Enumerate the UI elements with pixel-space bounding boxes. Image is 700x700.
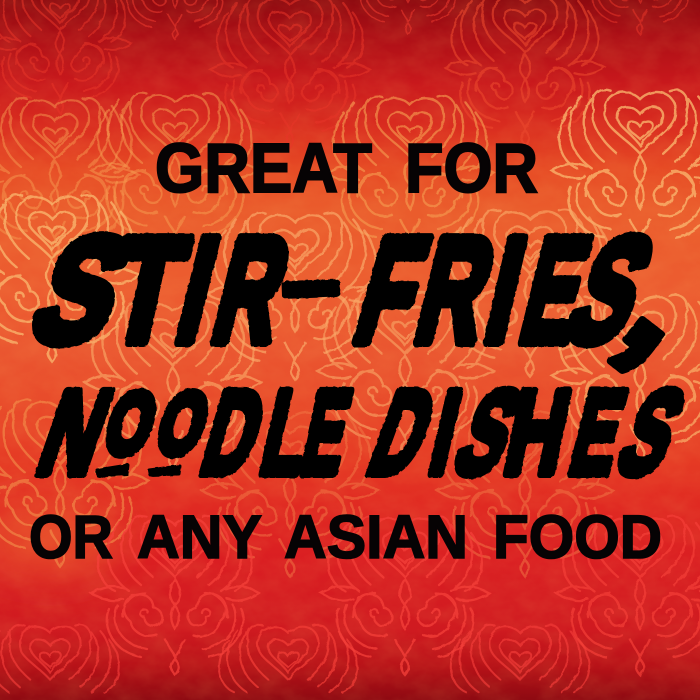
word: fries: R [403,207,508,373]
word: noodle: E [293,367,360,499]
word: stir [13,207,303,373]
dash: - [278,224,344,338]
word: noodle: D [190,366,278,498]
word: great: GREAT [155,129,372,207]
word: noodle: L [251,367,323,499]
word: dishes: E [560,368,636,499]
word: any: ANY [137,503,262,571]
word: asian: ASIAN [284,503,468,571]
brush headline: noodle dishes [24,366,700,499]
closing line: or any Asian food [29,503,662,571]
word: stir: R [200,207,303,373]
word: fries: F [341,208,442,373]
word: stir: S [13,208,149,373]
word: for: FOR [405,129,538,207]
word: food: FOOD [493,503,662,571]
word: fries: E [508,207,603,373]
word: dishes: D [355,366,451,498]
word: dishes: H [496,367,579,499]
word: noodle: O [96,375,166,472]
word: fries: I [474,207,538,373]
noodle underline strokes [97,465,180,476]
word: stir: I [164,207,231,373]
word: noodle: O [148,375,218,472]
word: stir: T [97,207,198,373]
brush headline: stir-fries [13,207,700,391]
word: or: OR [29,503,113,571]
heading: great for [155,129,538,207]
word: dishes: S [439,367,538,499]
word: noodle: N [24,366,126,498]
word: dishes [355,366,700,499]
word: dishes: I [420,367,470,499]
word: fries [341,207,674,373]
word: noodle [24,366,360,499]
